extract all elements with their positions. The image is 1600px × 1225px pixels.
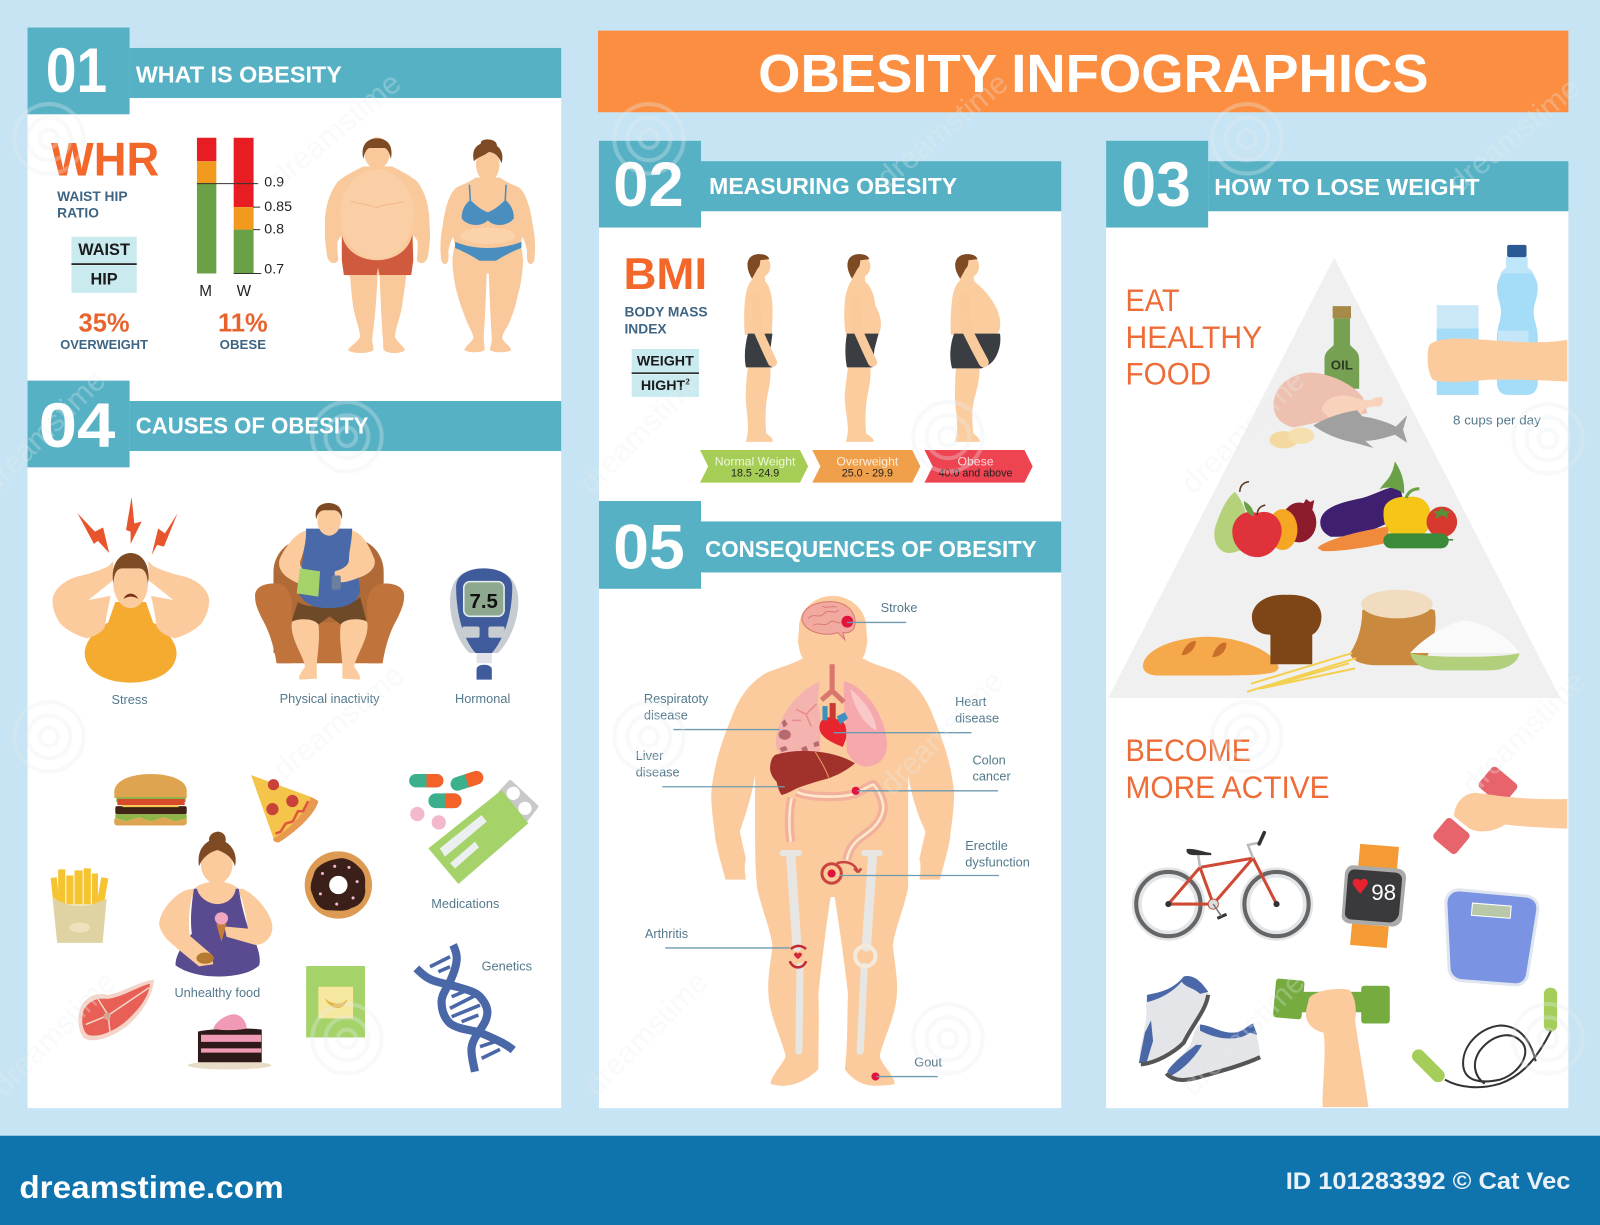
WHR heading and definition: WAIST HIP <box>57 189 128 204</box>
footer band <box>0 1136 1600 1225</box>
title banner <box>598 31 1568 112</box>
wheat <box>1247 653 1356 692</box>
food pyramid <box>1108 258 1560 698</box>
stat: 35% overweight: OVERWEIGHT <box>60 337 148 352</box>
arrow: overweight range <box>812 450 920 483</box>
reproductive organ <box>822 864 841 883</box>
watermark text: dreamstime <box>572 363 709 500</box>
icon: pizza slice <box>251 775 318 843</box>
chart: WHR bars for men and women: W <box>237 283 252 300</box>
BMI formula fraction <box>632 349 699 397</box>
label: stress: Stress <box>112 692 148 707</box>
callout: heart disease: Heart <box>955 694 987 709</box>
figure: body anatomy with organs <box>711 596 954 1086</box>
heading: eat healthy food <box>1126 282 1262 392</box>
orange <box>1268 509 1297 550</box>
trachea <box>821 664 844 702</box>
watermark text: dreamstime <box>263 66 408 195</box>
stat: 11% obese <box>218 310 268 352</box>
watermark text: dreamstime <box>1174 363 1311 500</box>
oil bottle <box>1324 306 1359 389</box>
callout: gout: Gout <box>914 1054 942 1069</box>
label: 8 cups per day: 8 cups per day <box>1453 412 1541 427</box>
section header 01 <box>28 28 561 114</box>
callout: stroke <box>847 600 917 622</box>
icon: hand with green dumbbell <box>1273 978 1390 1107</box>
callout: respiratory disease: disease <box>644 707 688 722</box>
icon: bathroom scale <box>1446 890 1538 985</box>
knee arthritis <box>790 946 806 967</box>
figure: normal weight man profile <box>744 254 773 442</box>
icon: hand with glass and water bottle <box>1428 245 1567 395</box>
section header 05: CONSEQUENCES OF OBESITY <box>705 536 1037 562</box>
panel: middle white column <box>599 211 1061 1108</box>
WHR heading and definition: RATIO <box>57 205 99 220</box>
liver <box>770 751 855 795</box>
callout: liver disease: Liver <box>636 748 664 763</box>
callout: colon cancer: cancer <box>972 769 1011 784</box>
arrow: obese range: 40.0 and above <box>939 468 1012 480</box>
intestine <box>789 785 883 860</box>
icon: jump rope <box>1409 988 1557 1087</box>
callout: heart disease <box>834 694 999 733</box>
arrow: obese range: Obese <box>957 454 994 468</box>
panel: left white column <box>28 98 561 1108</box>
icon: hand with red dumbbell <box>1432 765 1567 856</box>
heart <box>819 717 846 747</box>
stat: 11% obese: OBESE <box>220 337 266 352</box>
watermark text: dreamstime <box>266 658 411 786</box>
callout: colon cancer <box>857 752 1011 791</box>
section header 01: WHAT IS OBESITY <box>136 62 342 88</box>
watermark text: dreamstime <box>1174 965 1311 1102</box>
icon: smart watch <box>1342 844 1406 948</box>
WHR heading and definition <box>51 134 159 220</box>
icon: donut <box>305 851 372 919</box>
label: medications: Medications <box>431 896 499 911</box>
WHR formula fraction: HIP <box>90 271 118 289</box>
icon: medications <box>409 769 536 884</box>
WHR heading and definition: WHR <box>51 134 159 186</box>
condition dots <box>841 616 853 628</box>
chart: WHR bars for men and women: 0.9 <box>264 175 284 191</box>
heading: become more active <box>1126 732 1330 805</box>
tomato <box>1427 507 1457 537</box>
watermark text: dreamstime <box>1455 664 1592 801</box>
carrot <box>1317 527 1390 551</box>
oil bottle: OIL <box>1331 357 1353 372</box>
stat: 35% overweight: 35% <box>79 310 130 338</box>
arrow: normal weight range <box>700 450 808 483</box>
eggplant <box>1320 487 1403 537</box>
BMI heading and definition: BMI <box>623 248 707 299</box>
watermark text: dreamstime <box>577 965 715 1102</box>
icon: glucose meter <box>450 568 518 680</box>
arrow: obese range <box>924 450 1033 483</box>
section header 03 <box>1106 141 1568 228</box>
callout: erectile dysfunction: dysfunction <box>965 854 1030 869</box>
stat: 11% obese: 11% <box>218 310 268 338</box>
icon: chips bag <box>306 966 365 1037</box>
fish <box>1313 410 1407 448</box>
BMI heading and definition: BODY MASS <box>624 304 708 319</box>
heading: become more active: MORE ACTIVE <box>1126 769 1330 805</box>
arrow: overweight range: 25.0 - 29.9 <box>842 468 893 480</box>
section header 04: CAUSES OF OBESITY <box>136 413 369 439</box>
label: unhealthy food: Unhealthy food <box>174 985 260 1000</box>
figure: overweight man profile <box>844 254 881 442</box>
arrow: normal weight range: 18.5 -24.9 <box>731 468 779 480</box>
pepper <box>1383 497 1431 535</box>
figure: obese woman front view <box>440 139 535 352</box>
icon: cake slice <box>188 1014 271 1069</box>
section header 01: 01 <box>46 36 107 106</box>
loaf <box>1252 595 1321 664</box>
icon: DNA helix <box>416 945 513 1072</box>
icon: burger <box>114 774 187 826</box>
flour sack <box>1350 606 1436 665</box>
icon: woman eating <box>159 832 272 977</box>
apple <box>1232 512 1282 557</box>
potatoes <box>1269 431 1298 448</box>
chart: WHR bars for men and women: M <box>199 283 212 300</box>
callout: respiratory disease <box>644 691 780 730</box>
cucumber <box>1383 533 1449 548</box>
WHR formula fraction: WAIST <box>78 241 130 259</box>
BMI heading and definition <box>623 248 708 337</box>
callout: erectile dysfunction <box>840 838 1030 876</box>
chart: WHR bars for men and women: 0.85 <box>264 199 292 215</box>
callout: arthritis: Arthritis <box>645 926 688 941</box>
heading: eat healthy food: FOOD <box>1126 356 1211 392</box>
section header 05 <box>599 501 1061 589</box>
footer band: ID 101283392 © Cat Vec <box>1286 1168 1570 1195</box>
section header 05: 05 <box>613 512 685 582</box>
callout: gout <box>877 1054 942 1077</box>
callout: liver disease: disease <box>636 765 680 780</box>
icon: french fries <box>51 868 108 943</box>
baguette <box>1143 637 1279 676</box>
callout: heart disease: disease <box>955 710 999 725</box>
section header 03: 03 <box>1121 150 1191 220</box>
stat: 35% overweight <box>60 310 148 352</box>
WHR formula fraction <box>71 237 137 293</box>
icon: man sitting in armchair <box>255 503 404 680</box>
rice bowl <box>1410 620 1519 653</box>
BMI formula fraction: WEIGHT <box>637 353 694 369</box>
BMI formula fraction: 2 <box>685 378 690 387</box>
chart: WHR bars for men and women: 0.7 <box>264 261 284 277</box>
label: genetics: Genetics <box>482 958 532 973</box>
figure: obese man profile <box>950 254 1000 442</box>
BMI heading and definition: INDEX <box>624 322 667 337</box>
section header 02 <box>599 141 1061 228</box>
title banner: OBESITY INFOGRAPHICS <box>758 44 1429 104</box>
heading: become more active: BECOME <box>1126 732 1251 768</box>
section header 02: 02 <box>613 150 684 220</box>
callout: respiratory disease: Respiratoty <box>644 691 709 706</box>
label: hormonal: Hormonal <box>455 691 510 706</box>
bones <box>783 853 880 1051</box>
section header 04 <box>28 381 561 467</box>
lungs <box>776 682 820 754</box>
callout: liver disease <box>636 748 785 787</box>
section header 04: 04 <box>39 391 115 461</box>
chart: WHR bars for men and women: 0.8 <box>264 222 284 238</box>
icon: smart watch: 98 <box>1371 880 1396 905</box>
callout: stroke: Stroke <box>881 600 917 615</box>
watermark text: dreamstime <box>1442 71 1586 200</box>
icon: bicycle <box>1136 833 1309 936</box>
watermark swirls <box>14 104 1583 1073</box>
heading: eat healthy food: EAT <box>1126 282 1180 318</box>
body silhouette <box>711 596 954 1086</box>
icon: glucose meter: 7.5 <box>469 591 498 613</box>
brain <box>802 602 855 640</box>
icon: running shoes <box>1139 976 1260 1080</box>
callout: colon cancer: Colon <box>972 752 1006 767</box>
callout: erectile dysfunction: Erectile <box>965 838 1008 853</box>
watermark text: dreamstime <box>870 66 1015 195</box>
section header 03: HOW TO LOSE WEIGHT <box>1214 174 1480 200</box>
arrow: overweight range: Overweight <box>836 454 899 468</box>
pomegranate <box>1282 503 1316 542</box>
figure: obese man front view <box>325 137 430 353</box>
section header 02: MEASURING OBESITY <box>709 173 957 199</box>
chicken <box>1273 372 1367 428</box>
label: physical inactivity: Physical inactivity <box>280 691 380 706</box>
chart: WHR bars for men and women <box>197 138 292 300</box>
BMI formula fraction: HIGHT <box>641 378 685 394</box>
footer band: dreamstime.com <box>19 1169 284 1205</box>
watermark text: dreamstime <box>873 664 1010 801</box>
pear <box>1214 492 1251 553</box>
arrow: normal weight range: Normal Weight <box>715 454 796 468</box>
panel: right white column <box>1106 211 1568 1108</box>
heading: eat healthy food: HEALTHY <box>1126 319 1262 355</box>
icon: stress man with lightning bolts <box>53 497 209 683</box>
icon: steak <box>78 980 154 1040</box>
